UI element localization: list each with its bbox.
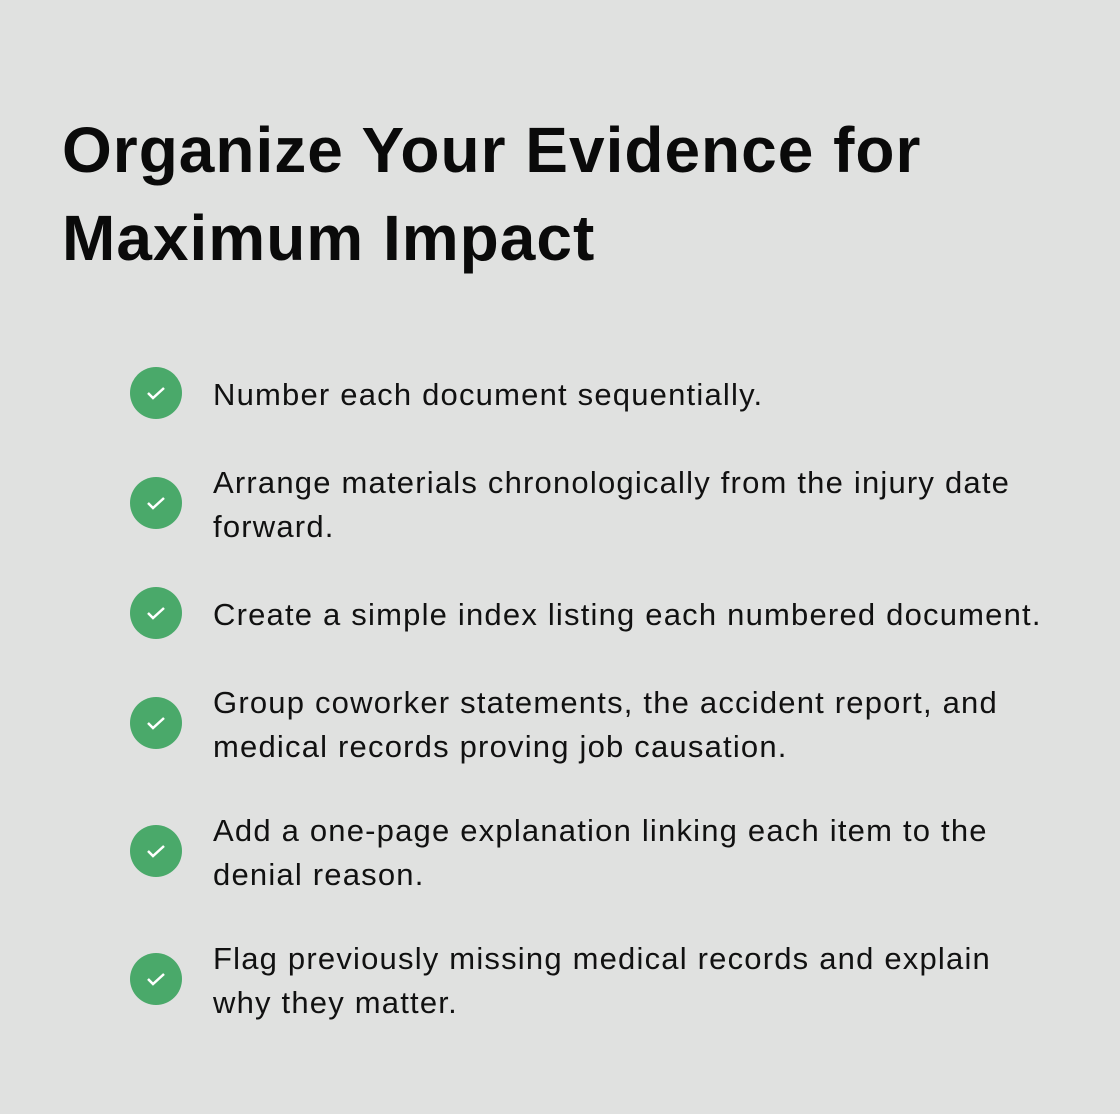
- title: [62, 114, 921, 274]
- item 2: Arrange materials chronologically from the injury date: [213, 465, 1010, 500]
- title: Organize Your Evidence for: [62, 114, 921, 186]
- item 3: [130, 587, 1042, 639]
- title: Maximum Impact: [62, 202, 595, 274]
- item 4: Group coworker statements, the accident report, and: [213, 685, 998, 720]
- item 1: Number each document sequentially.: [213, 377, 763, 412]
- item 5: [130, 813, 988, 892]
- item 2: forward.: [213, 509, 335, 544]
- item 6: [130, 941, 991, 1020]
- item 4: medical records proving job causation.: [213, 729, 788, 764]
- item 5: denial reason.: [213, 857, 425, 892]
- item 6: Flag previously missing medical records and explain: [213, 941, 991, 976]
- item 1: [130, 367, 763, 419]
- item 3: Create a simple index listing each numbered document.: [213, 597, 1042, 632]
- item 6: why they matter.: [213, 985, 458, 1020]
- item 5: Add a one-page explanation linking each item to the: [213, 813, 988, 848]
- item 4: [130, 685, 998, 764]
- item 2: [130, 465, 1010, 544]
